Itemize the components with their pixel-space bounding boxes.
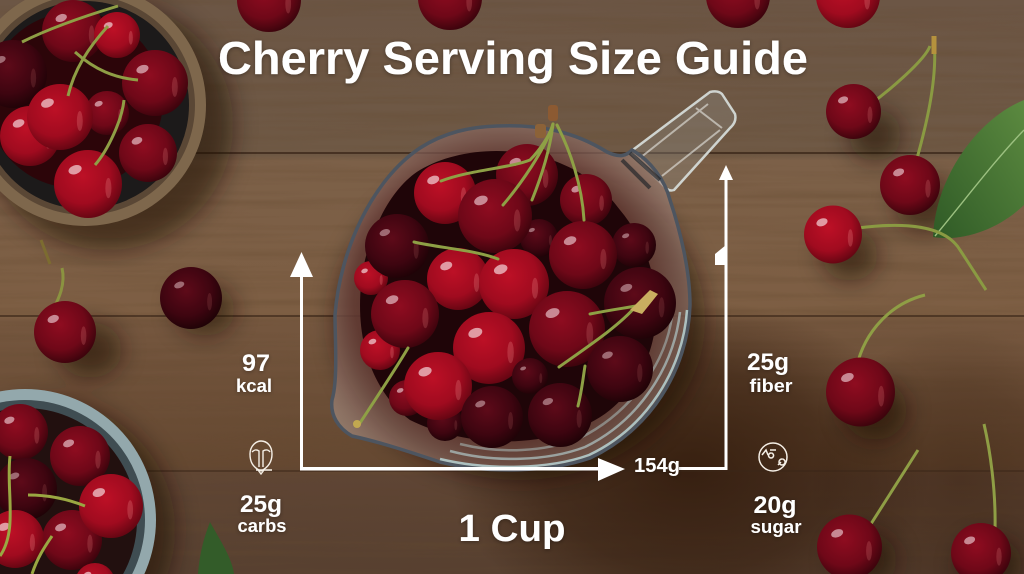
loose cherries: top edge bbox=[237, 0, 880, 32]
stat: sugar: sugar bbox=[750, 517, 802, 537]
dark interior behind cherries bbox=[360, 151, 656, 441]
stat: calories: kcal bbox=[236, 376, 272, 396]
right axis bbox=[679, 165, 733, 470]
left and bottom axis bbox=[290, 252, 625, 481]
stems in cup bbox=[358, 124, 636, 426]
stat: carbs: carbs bbox=[238, 516, 286, 536]
bowl of cherries: bottom left bbox=[0, 389, 156, 574]
stat: sugar: 20g bbox=[754, 492, 796, 519]
loose cherries: right side with stems bbox=[804, 36, 1011, 574]
stat: fiber bbox=[747, 349, 792, 396]
serving label: 1 Cup bbox=[458, 508, 566, 550]
loose cherries: left bbox=[34, 240, 222, 363]
measuring cup with cherries bbox=[332, 91, 735, 470]
glass handle bbox=[630, 91, 735, 190]
glass ridges bbox=[440, 310, 687, 467]
stat: carbs bbox=[238, 491, 286, 536]
measure arrows bbox=[290, 165, 733, 481]
stat: calories bbox=[236, 350, 272, 396]
leaf bbox=[933, 100, 1024, 238]
stat: calories: 97 bbox=[242, 350, 270, 377]
stat: carbs: 25g bbox=[240, 491, 282, 518]
stat: fiber: fiber bbox=[750, 376, 792, 396]
stem tips bbox=[353, 105, 658, 428]
glass cup body bbox=[332, 126, 690, 470]
small leaf bottom left bbox=[198, 522, 234, 574]
icon: carbs grain bbox=[250, 441, 272, 474]
stat: sugar bbox=[750, 492, 802, 537]
weight label: 154g bbox=[634, 455, 680, 477]
bowl of cherries: top left bbox=[0, 0, 206, 226]
title: Cherry Serving Size Guide bbox=[218, 32, 808, 84]
icon: sugar circle bbox=[759, 443, 787, 471]
cherries in cup bbox=[354, 144, 676, 448]
stat: fiber: 25g bbox=[747, 349, 789, 376]
